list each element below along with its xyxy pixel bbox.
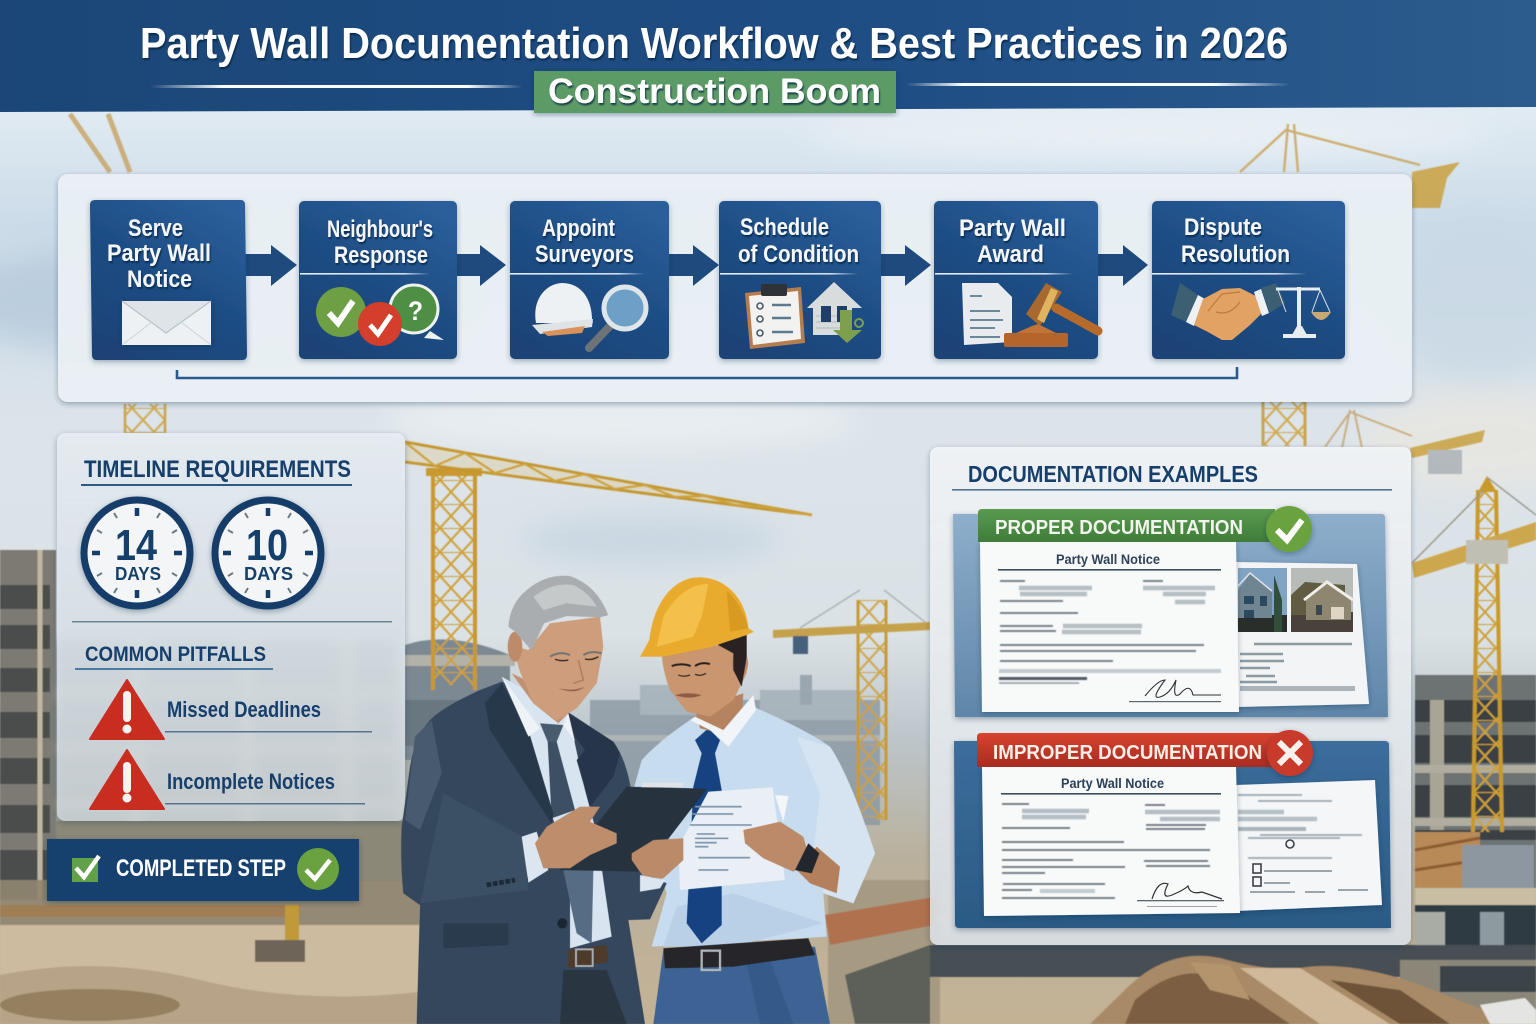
lapels xyxy=(485,683,553,823)
subtitle divider lines xyxy=(150,83,1290,88)
step 6: Dispute Resolution xyxy=(1152,201,1345,359)
clock: 14 days: 14 xyxy=(115,521,157,570)
hard hat xyxy=(640,577,754,657)
clock: 10 days: 10 xyxy=(246,521,288,570)
icon: green check xyxy=(1266,506,1312,552)
step 4: Schedule of Condition xyxy=(719,201,881,359)
arrow 5 xyxy=(1094,245,1148,286)
pitfall: incomplete notices: Incomplete Notices xyxy=(167,769,335,794)
shirt xyxy=(633,707,875,947)
neck xyxy=(512,673,570,723)
icon: check box xyxy=(72,856,99,882)
signature xyxy=(1145,680,1221,697)
step 2: Neighbour's Response: Response xyxy=(334,242,428,269)
icon: handshake xyxy=(1171,283,1285,340)
step 3: Appoint Surveyors: Surveyors xyxy=(535,241,634,268)
step 4: Schedule of Condition: of Condition xyxy=(738,241,859,268)
heading: common pitfalls: COMMON PITFALLS xyxy=(85,643,266,666)
step 1: Serve Party Wall Notice xyxy=(90,200,247,360)
icon: red cross xyxy=(1267,730,1313,776)
arrow 1 xyxy=(243,245,297,286)
shirt and tie xyxy=(502,677,612,948)
header banner xyxy=(0,0,1536,112)
icon: hard hat xyxy=(532,283,593,336)
step 1: Serve Party Wall Notice: Serve xyxy=(128,215,183,242)
arrow 2 xyxy=(453,245,506,286)
tie xyxy=(687,728,722,943)
suit jacket xyxy=(401,682,667,1024)
hands xyxy=(535,807,617,868)
banner: improper documentation xyxy=(977,733,1280,767)
step 1: Serve Party Wall Notice: Notice xyxy=(127,266,192,293)
illustration: two professionals reviewing documents xyxy=(401,576,875,1024)
dirt mound xyxy=(1090,956,1520,1024)
trousers xyxy=(653,947,830,1024)
step 5: Party Wall Award: Award xyxy=(977,241,1044,268)
clock: 10 days xyxy=(215,500,321,606)
legend: completed step: COMPLETED STEP xyxy=(116,855,286,882)
photo: house one xyxy=(1238,568,1287,632)
legend: completed step xyxy=(47,839,359,901)
pitfall: missed deadlines xyxy=(90,680,372,739)
arrow 3 xyxy=(664,245,719,286)
pitfall: incomplete notices xyxy=(90,750,365,809)
panel: workflow xyxy=(58,174,1412,402)
man in suit xyxy=(401,576,707,1024)
clock: 14 days xyxy=(84,500,190,606)
signature xyxy=(1152,883,1222,899)
surveyor in hard hat xyxy=(633,577,875,1024)
button and sleeve xyxy=(557,918,567,928)
main notice document: Party Wall Notice xyxy=(1056,552,1160,567)
strip of scaffold below sidebar xyxy=(56,821,405,881)
supporting sheet xyxy=(1236,780,1382,911)
icon: scales xyxy=(1276,287,1331,338)
main notice document: Party Wall Notice xyxy=(1061,776,1164,791)
head xyxy=(512,617,603,721)
icon: response badges: ? xyxy=(408,296,423,326)
example: improper documentation xyxy=(954,730,1391,928)
main notice document xyxy=(980,542,1239,712)
pitfall: missed deadlines: Missed Deadlines xyxy=(167,697,321,722)
heading: timeline requirements: TIMELINE REQUIREMENTS xyxy=(84,456,351,483)
clipboard xyxy=(560,787,707,872)
icon: magnifier xyxy=(589,287,646,348)
main notice document xyxy=(982,767,1240,916)
panel: left sidebar xyxy=(57,433,405,821)
left hazy building behind sidebar xyxy=(56,640,396,835)
belt xyxy=(568,945,608,968)
ground xyxy=(0,880,420,930)
hair xyxy=(508,576,608,651)
right foreground crane xyxy=(1472,492,1502,832)
step 2: Neighbour's Response: Neighbour's xyxy=(327,216,433,243)
arrow 4 xyxy=(877,245,931,286)
subtitle badge: Construction Boom xyxy=(548,72,881,111)
step 6: Dispute Resolution: Resolution xyxy=(1181,241,1290,268)
far city haze xyxy=(590,675,880,825)
main crane xyxy=(405,440,812,690)
icon: clipboard xyxy=(745,284,805,349)
step 1: Serve Party Wall Notice: Party Wall xyxy=(107,240,211,267)
panel: documentation examples xyxy=(930,447,1411,945)
step 6: Dispute Resolution: Dispute xyxy=(1184,214,1262,241)
workflow bracket xyxy=(177,367,1237,378)
icon: document xyxy=(962,283,1012,345)
icon: response badges xyxy=(316,285,444,346)
step 5: Party Wall Award: Party Wall xyxy=(959,215,1066,242)
banner: proper documentation xyxy=(978,509,1275,542)
clock: 14 days: DAYS xyxy=(115,564,161,584)
step 2: Neighbour's Response xyxy=(299,201,457,359)
step 3: Appoint Surveyors: Appoint xyxy=(542,215,615,242)
forearm and hand xyxy=(797,847,840,893)
watch xyxy=(795,843,819,873)
step 4: Schedule of Condition: Schedule xyxy=(740,214,829,241)
banner: proper documentation: PROPER DOCUMENTATION xyxy=(995,517,1243,539)
clock: 10 days: DAYS xyxy=(244,564,293,584)
step 3: Appoint Surveyors xyxy=(510,201,669,359)
heading: documentation examples: DOCUMENTATION EXAMPLES xyxy=(968,461,1258,487)
icon: envelope xyxy=(122,301,211,345)
icon: check circle xyxy=(297,848,339,890)
banner: improper documentation: IMPROPER DOCUMENTATION xyxy=(993,741,1262,764)
photo: house two xyxy=(1291,568,1353,632)
belt xyxy=(663,938,815,968)
supporting sheet with photos xyxy=(1236,562,1369,707)
step 5: Party Wall Award xyxy=(934,201,1098,359)
face xyxy=(662,640,747,717)
neck and collar xyxy=(695,693,743,733)
example: proper documentation xyxy=(953,506,1388,717)
icon: gavel xyxy=(1004,283,1098,347)
right building xyxy=(1415,675,1536,960)
title: Party Wall Documentation Workflow & Best Practices in 2026 xyxy=(140,19,1288,68)
icon: house with arrow xyxy=(807,282,863,343)
sheet of paper xyxy=(678,787,785,890)
